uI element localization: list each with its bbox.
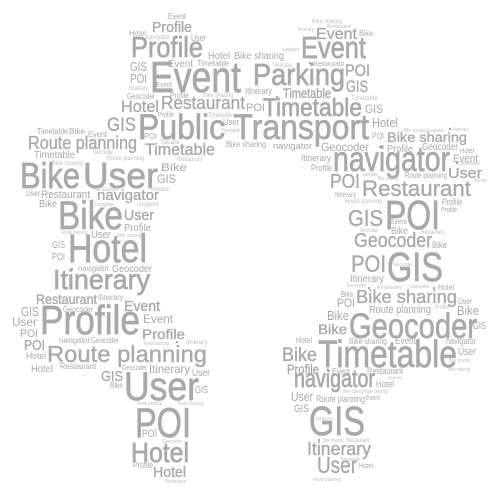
small words, left half: Restaurant <box>41 189 90 201</box>
small words, left half: navigator <box>146 35 170 41</box>
small words, left half: Itinerary <box>129 86 148 92</box>
small words, right half: GIS <box>473 321 486 332</box>
small words, left half: GIS <box>157 172 176 186</box>
small words, right half: Bike sharing <box>378 176 398 182</box>
small words, right half: Geocoder <box>422 142 459 153</box>
word: Event (top left): Event <box>150 53 241 102</box>
word: Geocoder: Geocoder <box>349 307 477 346</box>
small words, left half: GIS <box>21 304 39 319</box>
small words, left half: Event <box>168 59 193 70</box>
small words, right half: Hotel <box>359 463 373 470</box>
small words, left half: navigator <box>137 202 159 208</box>
small words, right half: Timetable <box>459 161 480 167</box>
small words, right half: Itinerary <box>474 178 487 184</box>
small words, right half: navigator <box>409 284 430 290</box>
word: GIS (right): GIS <box>387 244 443 290</box>
small words, right half: Profile <box>442 197 462 207</box>
small words, right half: Bike sharing <box>312 19 342 25</box>
small words, right half: Restaurant <box>313 61 344 68</box>
small words, right half: Bike sharing <box>343 389 363 395</box>
small words, right half: Itinerary <box>298 27 314 33</box>
word: POI (bottom left): POI <box>135 399 191 446</box>
small words, right half: Itinerary <box>307 439 371 459</box>
small words, left half: User <box>223 117 239 127</box>
small words, left half: Geocoder <box>93 150 113 156</box>
small words, left half: Route planning <box>144 341 169 347</box>
small words, right half: Bike <box>327 308 349 323</box>
small words, right half: GIS <box>365 102 383 116</box>
small words, right half: User <box>458 346 476 358</box>
small words, left half: Restaurant <box>161 93 245 113</box>
word: Timetable: Timetable <box>263 94 362 122</box>
small words, right half: Event <box>453 153 478 165</box>
small words, right half: navigator <box>273 141 312 151</box>
small words, left half: POI <box>24 337 45 354</box>
word: User (lower left): User <box>124 365 199 409</box>
small words, right half: Bike <box>391 226 408 237</box>
word: navigator (lower right): navigator <box>294 365 375 393</box>
word: Profile (lower left): Profile <box>40 297 140 343</box>
small words, left half: Event <box>168 12 187 21</box>
small words, left half: POI <box>130 71 147 86</box>
small words, left half: Itinerary <box>149 362 190 376</box>
small words, right half: Geocoder <box>321 140 369 154</box>
small words, right half: Profile <box>311 163 332 173</box>
word: Timetable (lower right): Timetable <box>318 334 457 376</box>
small words, right half: Timetable <box>283 85 331 101</box>
small words, right half: Bike <box>282 345 317 366</box>
small words, left half: User <box>192 368 211 379</box>
small words, right half: Event <box>390 219 407 226</box>
word: User (bottom right): User <box>317 452 357 478</box>
word: Hotel (bottom left): Hotel <box>131 437 189 468</box>
word: Itinerary: Itinerary <box>53 264 150 295</box>
small words, right half: Hotel <box>376 379 394 389</box>
small words, left half: Geocoder <box>91 336 119 345</box>
small words, right half: POI <box>337 296 355 310</box>
small words, right half: Restaurant <box>346 438 369 444</box>
small words, right half: Event <box>366 395 380 402</box>
small words, left half: navigator <box>97 187 159 204</box>
small words, left half: navigator <box>95 202 114 208</box>
small words, left half: POI <box>20 328 38 340</box>
small words, left half: Event <box>143 312 174 326</box>
word: Route planning: Route planning <box>47 341 207 367</box>
small words, left half: Restaurant <box>94 187 118 193</box>
small words, left half: Itinerary <box>186 340 207 346</box>
small words, right half: Route planning <box>405 171 447 180</box>
small words, left half: Hotel <box>26 351 46 361</box>
small words, left half: Restaurant <box>36 291 97 307</box>
small words, left half: navigator <box>78 264 109 273</box>
small words, right half: Itinerary <box>316 416 335 421</box>
small words, right half: Bike <box>359 29 373 38</box>
small words, left half: Bike <box>69 127 86 136</box>
small words, right half: Timetable <box>351 96 379 102</box>
small words, right half: Hotel <box>460 148 474 155</box>
small words, right half: Bike <box>457 303 479 318</box>
small words, right half: Geocoder <box>346 283 366 289</box>
small words, left half: Hotel <box>153 464 186 481</box>
small words, left half: Restaurant <box>165 479 187 485</box>
small words, left half: navigator <box>59 336 90 345</box>
small words, left half: Geocoder <box>63 305 93 314</box>
small words, right half: POI <box>351 251 386 278</box>
small words, right half: User <box>448 165 482 182</box>
small words, left half: Bike <box>161 162 187 174</box>
small words, right half: Bike sharing <box>356 287 457 307</box>
small words, right half: Restaurant <box>421 230 444 236</box>
word: Hotel: Hotel <box>68 227 147 271</box>
small words, right half: navigator <box>282 47 300 53</box>
small words, left half: Route planning <box>107 156 144 162</box>
small words, left half: Route planning <box>28 133 137 153</box>
small words, left half: Route planning <box>178 401 203 407</box>
small words, left half: Geocoder <box>122 365 148 372</box>
small words, right half: Profile <box>441 207 457 214</box>
small words, right half: Geocoder <box>354 230 432 252</box>
small words, left half: User <box>26 189 40 198</box>
small words, left half: Hotel <box>121 97 159 116</box>
small words, right half: Bike <box>341 290 353 299</box>
small words, left half: Bike sharing <box>52 161 83 167</box>
small words, left half: Bike <box>39 199 57 210</box>
small words, left half: GIS <box>195 385 208 396</box>
small words, right half: Event <box>395 336 416 347</box>
word: Public Transport: Public Transport <box>138 108 369 147</box>
small words, left half: Geocoder <box>162 439 182 445</box>
small words, right half: Bike <box>432 240 447 250</box>
small words, right half: Route planning <box>364 389 388 395</box>
small words, right half: Hotel <box>438 283 454 292</box>
small words, right half: Route planning <box>316 394 365 404</box>
small words, left half: Bike sharing <box>226 140 266 149</box>
small words, left half: User <box>12 315 37 329</box>
small words, right half: Event <box>316 26 358 43</box>
word: Bike: Bike <box>20 155 80 196</box>
small words, right half: Bike sharing <box>387 129 467 145</box>
small words, left half: Event <box>124 298 161 315</box>
small words, left half: Hotel <box>129 29 146 38</box>
small words, right half: Itinerary <box>350 274 384 285</box>
small words, right half: Route planning <box>345 199 382 205</box>
small words, right half: Timetable <box>272 63 293 69</box>
small words, right half: POI <box>246 102 265 114</box>
small words, right half: User <box>291 389 314 404</box>
small words, right half: Geocoder <box>393 262 413 268</box>
word: POI (right): POI <box>385 192 440 238</box>
small words, left half: Event <box>156 82 172 89</box>
small words, right half: Itinerary <box>335 192 356 199</box>
small words, left half: GIS <box>52 240 65 251</box>
small words, left half <box>12 12 284 485</box>
small words, right half: Hotel <box>296 336 312 345</box>
small words, right half: Route planning <box>313 477 341 483</box>
small words, left half: GIS <box>101 368 123 385</box>
small words, left half: Profile <box>152 19 192 36</box>
small words, right half: GIS <box>348 205 383 231</box>
small words, left half: Itinerary <box>98 293 123 302</box>
small words, left half: Timetable <box>197 59 230 68</box>
small words, right half: User <box>458 297 472 306</box>
small words, left half: Timetable <box>34 150 75 161</box>
small words, left half: Bike <box>110 381 123 390</box>
word: Event (top right): Event <box>301 30 366 65</box>
small words, left half: Hotel <box>31 364 53 375</box>
small words, right half: Event <box>332 367 351 376</box>
word: navigator: navigator <box>333 140 450 179</box>
small words, left half: User <box>91 229 111 241</box>
small words, left half: Restaurant <box>177 157 202 163</box>
small words, right half: Hotel <box>372 115 398 130</box>
word: Bike (centre left): Bike <box>58 194 123 238</box>
small words, left half: Hotel <box>208 51 230 62</box>
small words, right half: Restaurant <box>327 24 351 30</box>
small words, right half: Restaurant <box>367 366 403 376</box>
small words, right half: Route planning <box>369 304 431 316</box>
small words, left half: POI <box>142 428 157 440</box>
word: Restaurant: Restaurant <box>362 176 471 201</box>
small words, left half: Timetable <box>208 113 233 119</box>
small words, left half: POI <box>52 252 65 263</box>
small words, left half: Restaurant <box>60 362 97 371</box>
small words, left half: Profile <box>158 112 174 119</box>
small words, right half: Itinerary <box>388 375 403 380</box>
small words, left half: Profile <box>133 460 153 470</box>
small words, left half: Profile <box>142 326 185 342</box>
small words, left half: Bike sharing <box>203 93 233 99</box>
small words, right half: Bike sharing <box>323 438 343 444</box>
small words, right half: navigator <box>426 128 444 134</box>
small words, right half: Timetable <box>340 457 360 463</box>
small words, left half: Itinerary <box>245 86 272 96</box>
small words, right half: POI <box>345 61 370 80</box>
small words, right half: POI <box>330 171 360 193</box>
small words, left half: Timetable <box>37 127 68 136</box>
small words, left half: Profile <box>124 223 151 234</box>
small words, left half: Geocoder <box>112 264 153 275</box>
small words, right half: GIS <box>294 403 309 415</box>
small words, right half: Bike sharing <box>449 358 470 364</box>
small words, right half: Bike sharing <box>448 367 470 373</box>
right half of the gear <box>246 19 487 483</box>
small words, right half: Profile <box>435 305 450 311</box>
small words, left half: Profile <box>170 91 189 100</box>
small words, left half: Timetable <box>160 140 179 146</box>
small words, left half: User <box>191 33 206 43</box>
small words, right half: Profile <box>287 361 319 377</box>
small words, left half: Timetable <box>221 128 240 134</box>
small words, left half: Route planning <box>62 230 87 236</box>
small words, left half: Event <box>88 130 108 139</box>
small words, right half: Profile <box>387 144 413 155</box>
small words, right half: Bike <box>318 321 347 337</box>
small words, right half: Bike sharing <box>404 128 425 134</box>
small words, right half: Itinerary <box>453 127 469 133</box>
small words, left half: GIS <box>107 115 136 136</box>
small words, right half: Geocoder <box>360 228 379 234</box>
small words, left half: Timetable <box>150 187 169 193</box>
left half of the gear <box>12 12 284 485</box>
small words, left half: Bike sharing <box>234 51 284 62</box>
word: User: User <box>83 155 158 196</box>
small words, left half: Route planning <box>137 401 162 407</box>
small words, right half: Restaurant <box>377 285 402 291</box>
word: GIS (bottom right): GIS <box>309 398 365 444</box>
small words, left half: Timetable <box>145 140 215 159</box>
small words, left half: Bike sharing <box>117 233 141 239</box>
small words, right half: Itinerary <box>301 153 331 163</box>
small words, right half: navigator <box>363 172 378 178</box>
small words, left half: GIS <box>130 59 147 74</box>
small words, left half: Geocoder <box>127 92 155 101</box>
small words, right half: POI <box>372 131 384 141</box>
word: Parking: Parking <box>253 57 345 92</box>
small words, right half: Bike sharing <box>349 337 387 346</box>
word: Profile: Profile <box>131 32 203 64</box>
small words, right half <box>246 19 487 483</box>
small words, left half: User <box>124 207 154 224</box>
small words, right half: navigator <box>446 336 476 346</box>
small words, left half: POI <box>144 132 157 141</box>
small words, right half: GIS <box>346 77 368 96</box>
